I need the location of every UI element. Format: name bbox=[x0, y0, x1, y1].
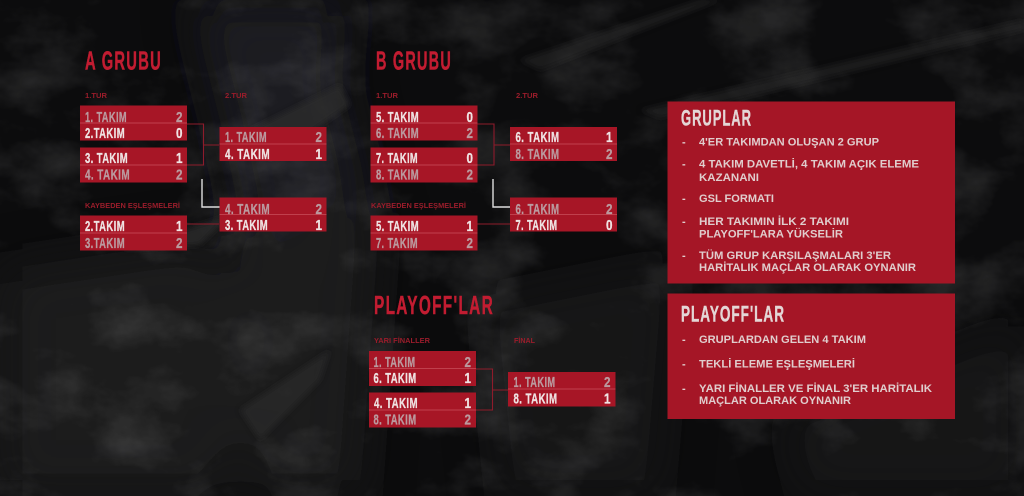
heading: GRUPLAR: GRUPLAR bbox=[681, 106, 752, 130]
bullet list: groups bbox=[682, 136, 919, 274]
match: 2.TAKIM vs 3.TAKIM: 3.TAKIM bbox=[85, 236, 125, 252]
bullet list: groups: TÜM GRUP KARŞILAŞMALARI 3'ER bbox=[699, 249, 891, 262]
panel: B GRUBU bracket bbox=[370, 46, 617, 252]
label: 2.TUR: 2.TUR bbox=[225, 91, 248, 100]
bullet list: groups: - bbox=[682, 250, 686, 262]
bullet list: groups: HER TAKIMIN İLK 2 TAKIMI bbox=[699, 215, 849, 228]
label: KAYBEDEN EŞLEŞMELERİ: KAYBEDEN EŞLEŞMELERİ bbox=[371, 201, 466, 210]
label: 1.TUR: 1.TUR bbox=[85, 91, 108, 100]
match: 5. TAKIM vs 7. TAKIM: 5. TAKIM bbox=[376, 219, 419, 235]
match: 1. TAKIM vs 4. TAKIM bbox=[220, 127, 326, 163]
label: 2.TUR: 2.TUR bbox=[516, 91, 539, 100]
bullet list: groups: 4 TAKIM DAVETLİ, 4 TAKIM AÇIK ELEME bbox=[699, 158, 919, 170]
match: 4. TAKIM vs 3. TAKIM bbox=[220, 198, 326, 234]
bullet list: playoffs: - bbox=[682, 334, 686, 346]
match: 2.TAKIM vs 3.TAKIM: 1 bbox=[176, 219, 182, 235]
bullet list: groups: PLAYOFF'LARA YÜKSELİR bbox=[699, 228, 843, 240]
match: 6. TAKIM vs 8. TAKIM: 6. TAKIM bbox=[516, 130, 560, 146]
match: 1. TAKIM vs 8. TAKIM bbox=[508, 372, 616, 408]
match: 1. TAKIM vs 6. TAKIM: 6. TAKIM bbox=[374, 371, 416, 387]
match: 1. TAKIM vs 6. TAKIM: 2 bbox=[464, 355, 471, 371]
panel: GRUPLAR info bbox=[668, 102, 955, 284]
bullet list: playoffs: TEKLİ ELEME EŞLEŞMELERİ bbox=[699, 358, 855, 370]
match: 6. TAKIM vs 8. TAKIM: 8. TAKIM bbox=[516, 147, 560, 163]
match: 1. TAKIM vs 4. TAKIM: 4. TAKIM bbox=[225, 147, 270, 163]
match: 3. TAKIM vs 4. TAKIM bbox=[80, 148, 187, 184]
bullet list: groups: KAZANANI bbox=[699, 172, 759, 184]
match: 3. TAKIM vs 4. TAKIM: 1 bbox=[176, 151, 182, 167]
match: 4. TAKIM vs 8. TAKIM: 4. TAKIM bbox=[374, 396, 418, 412]
match: 6. TAKIM vs 8. TAKIM: 1 bbox=[606, 130, 612, 146]
match: 7. TAKIM vs 8. TAKIM bbox=[370, 148, 478, 184]
bullet list: groups: - bbox=[682, 136, 686, 148]
match: 7. TAKIM vs 8. TAKIM: 2 bbox=[466, 168, 473, 184]
match: 4. TAKIM vs 8. TAKIM: 8. TAKIM bbox=[374, 412, 416, 428]
match: 1. TAKIM vs 2.TAKIM bbox=[80, 106, 187, 142]
connector: round 1 to round 2 bbox=[478, 124, 510, 165]
match: 4. TAKIM vs 3. TAKIM: 3. TAKIM bbox=[225, 218, 268, 234]
bullet list: playoffs: - bbox=[682, 383, 686, 395]
match: 4. TAKIM vs 3. TAKIM: 4. TAKIM bbox=[225, 202, 270, 218]
connector: losers match bbox=[478, 223, 510, 225]
match: 5. TAKIM vs 7. TAKIM: 1 bbox=[466, 219, 473, 235]
heading: A GRUBU: A GRUBU bbox=[85, 46, 162, 76]
match: 1. TAKIM vs 4. TAKIM: 1. TAKIM bbox=[225, 130, 267, 146]
panel: PLAYOFF'LAR info bbox=[668, 294, 955, 419]
match: 3. TAKIM vs 4. TAKIM: 2 bbox=[176, 168, 182, 184]
match: 5. TAKIM vs 7. TAKIM: 2 bbox=[466, 236, 473, 252]
match: 5. TAKIM vs 6. TAKIM: 5. TAKIM bbox=[376, 110, 419, 126]
match: 1. TAKIM vs 2.TAKIM: 1. TAKIM bbox=[85, 110, 127, 126]
match: 1. TAKIM vs 8. TAKIM: 8. TAKIM bbox=[514, 392, 558, 408]
bullet list: groups: GSL FORMATI bbox=[699, 193, 774, 205]
bullet list: playoffs bbox=[682, 334, 932, 407]
match: 1. TAKIM vs 6. TAKIM: 1 bbox=[464, 371, 471, 387]
heading: PLAYOFF'LAR: PLAYOFF'LAR bbox=[681, 302, 785, 326]
match: 6. TAKIM vs 7. TAKIM: 2 bbox=[606, 202, 612, 218]
bullet list: playoffs: - bbox=[682, 358, 686, 370]
bullet list: groups: 4'ER TAKIMDAN OLUŞAN 2 GRUP bbox=[699, 136, 879, 148]
bullet list: groups: HARİTALIK MAÇLAR OLARAK OYNANIR bbox=[699, 261, 916, 274]
match: 6. TAKIM vs 7. TAKIM: 7. TAKIM bbox=[516, 218, 558, 234]
match: 5. TAKIM vs 7. TAKIM: 7. TAKIM bbox=[376, 236, 418, 252]
match: 2.TAKIM vs 3.TAKIM: 2 bbox=[176, 236, 182, 252]
bullet list: playoffs: YARI FİNALLER VE FİNAL 3'ER HARİTALIK bbox=[699, 382, 932, 395]
match: 4. TAKIM vs 8. TAKIM: 1 bbox=[464, 396, 471, 412]
match: 1. TAKIM vs 2.TAKIM: 0 bbox=[176, 126, 182, 142]
bullet list: groups: - bbox=[682, 193, 686, 205]
match: 5. TAKIM vs 6. TAKIM bbox=[370, 106, 478, 142]
bullet list: playoffs: GRUPLARDAN GELEN 4 TAKIM bbox=[699, 334, 866, 346]
heading: PLAYOFF'LAR: PLAYOFF'LAR bbox=[374, 290, 494, 320]
match: 5. TAKIM vs 7. TAKIM bbox=[370, 216, 478, 252]
match: 2.TAKIM vs 3.TAKIM: 2.TAKIM bbox=[85, 219, 125, 235]
match: 6. TAKIM vs 7. TAKIM: 6. TAKIM bbox=[516, 202, 560, 218]
bullet list: playoffs: MAÇLAR OLARAK OYNANIR bbox=[699, 395, 851, 407]
match: 5. TAKIM vs 6. TAKIM: 0 bbox=[466, 110, 473, 126]
heading: B GRUBU: B GRUBU bbox=[376, 46, 452, 76]
match: 1. TAKIM vs 2.TAKIM: 2.TAKIM bbox=[85, 126, 125, 142]
match: 3. TAKIM vs 4. TAKIM: 4. TAKIM bbox=[85, 168, 130, 184]
match: 7. TAKIM vs 8. TAKIM: 8. TAKIM bbox=[376, 168, 419, 184]
match: 6. TAKIM vs 8. TAKIM: 2 bbox=[606, 147, 612, 163]
match: 1. TAKIM vs 4. TAKIM: 2 bbox=[316, 130, 322, 146]
bullet list: groups: - bbox=[682, 158, 686, 170]
connector: semifinals to final bbox=[476, 369, 508, 410]
match: 4. TAKIM vs 3. TAKIM: 1 bbox=[316, 218, 322, 234]
match: 7. TAKIM vs 8. TAKIM: 7. TAKIM bbox=[376, 151, 418, 167]
match: 4. TAKIM vs 3. TAKIM: 2 bbox=[316, 202, 322, 218]
match: 1. TAKIM vs 6. TAKIM bbox=[369, 351, 476, 387]
match: 4. TAKIM vs 8. TAKIM bbox=[369, 392, 476, 428]
match: 6. TAKIM vs 8. TAKIM bbox=[510, 127, 617, 163]
match: 1. TAKIM vs 8. TAKIM: 1 bbox=[604, 392, 610, 408]
label: 1.TUR: 1.TUR bbox=[376, 91, 399, 100]
label: FİNAL: FİNAL bbox=[514, 336, 535, 345]
match: 5. TAKIM vs 6. TAKIM: 6. TAKIM bbox=[376, 126, 419, 142]
match: 1. TAKIM vs 2.TAKIM: 2 bbox=[176, 110, 182, 126]
match: 1. TAKIM vs 6. TAKIM: 1. TAKIM bbox=[374, 355, 416, 371]
bullet list: groups: - bbox=[682, 216, 686, 228]
match: 1. TAKIM vs 8. TAKIM: 1. TAKIM bbox=[514, 375, 556, 391]
arrow: elbow to losers match bbox=[202, 179, 220, 207]
label: KAYBEDEN EŞLEŞMELERİ: KAYBEDEN EŞLEŞMELERİ bbox=[85, 201, 180, 210]
match: 5. TAKIM vs 6. TAKIM: 2 bbox=[466, 126, 473, 142]
match: 6. TAKIM vs 7. TAKIM: 0 bbox=[606, 218, 612, 234]
match: 6. TAKIM vs 7. TAKIM bbox=[510, 198, 617, 234]
label: YARI FİNALLER: YARI FİNALLER bbox=[374, 336, 431, 345]
connector: round 1 to round 2 bbox=[187, 124, 219, 165]
panel: A GRUBU bracket bbox=[80, 46, 326, 252]
match: 1. TAKIM vs 8. TAKIM: 2 bbox=[604, 375, 610, 391]
match: 7. TAKIM vs 8. TAKIM: 0 bbox=[466, 151, 473, 167]
match: 1. TAKIM vs 4. TAKIM: 1 bbox=[316, 147, 322, 163]
panel: PLAYOFF'LAR bracket bbox=[369, 290, 616, 428]
connector: losers match bbox=[187, 223, 219, 225]
match: 3. TAKIM vs 4. TAKIM: 3. TAKIM bbox=[85, 151, 128, 167]
arrow: elbow to losers match bbox=[493, 179, 511, 207]
match: 2.TAKIM vs 3.TAKIM bbox=[80, 216, 187, 252]
match: 4. TAKIM vs 8. TAKIM: 2 bbox=[464, 412, 471, 428]
